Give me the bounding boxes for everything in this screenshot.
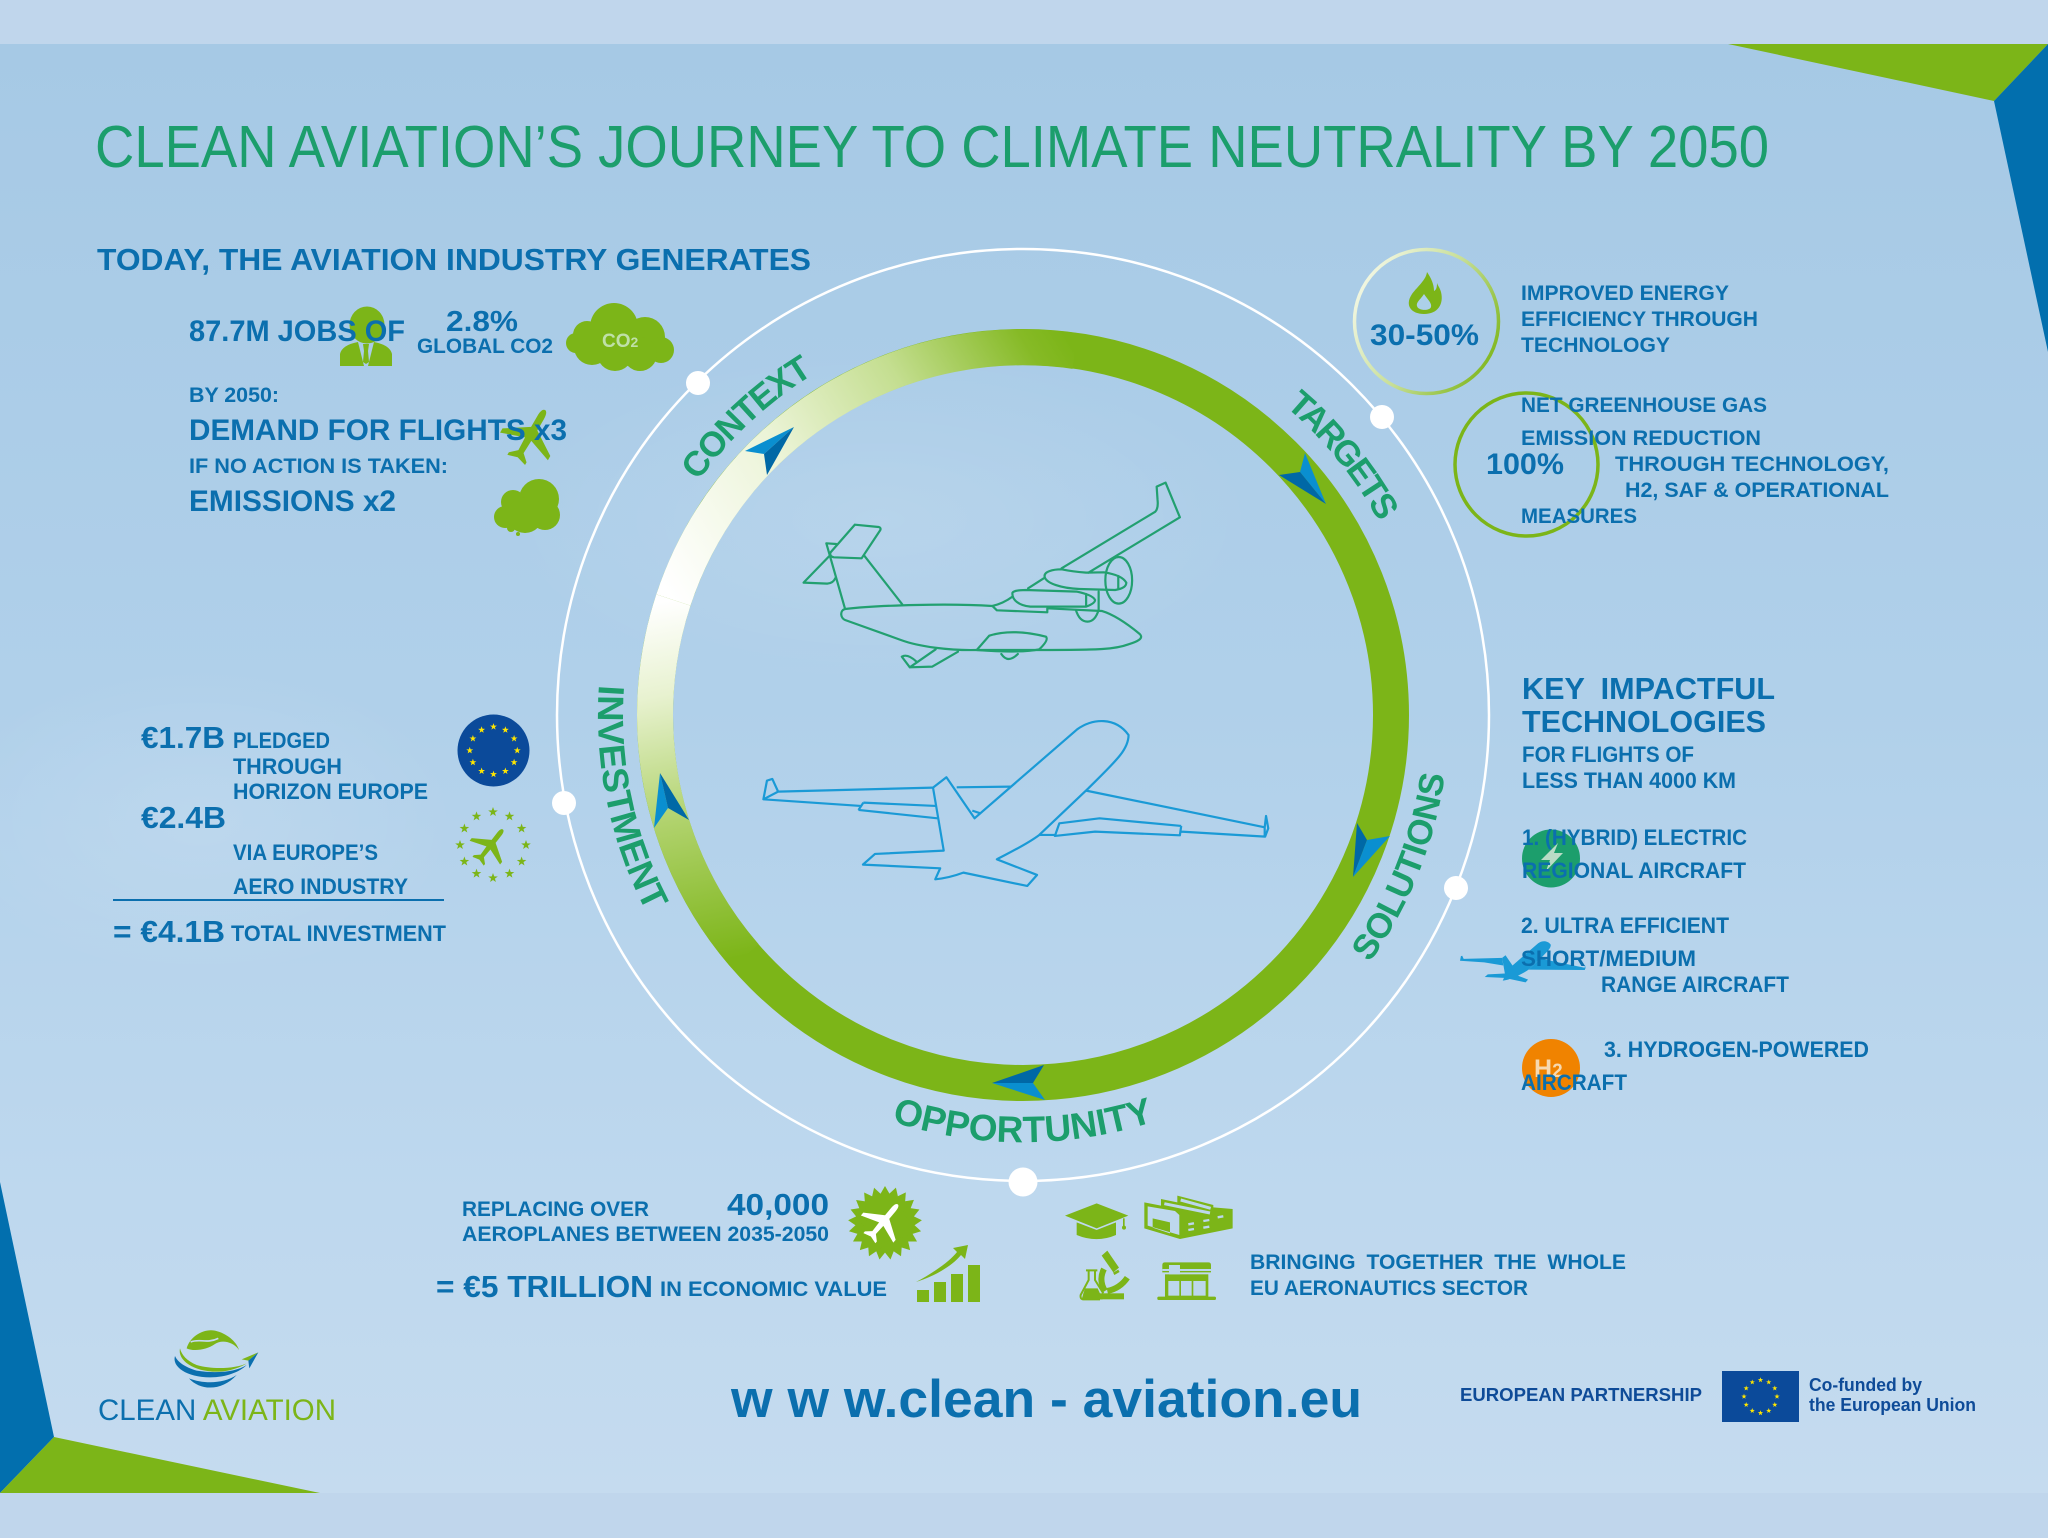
icon: flame [1409,272,1442,314]
text: energy efficiency: TECHNOLOGY [1521,334,1670,357]
icon: CO2 cloud: CO2 [602,331,638,352]
icon: CO2 cloud [566,303,674,371]
stat: 1.7B: HORIZON EUROPE [233,779,428,804]
co-funded text: Co-funded by [1809,1375,1922,1395]
text: economic value: = €5 TRILLION [436,1269,653,1304]
text: economic value [436,1269,887,1304]
stat: 1.7B [141,720,428,804]
corner accent: bottom left [0,1182,320,1493]
text: replacing: REPLACING OVER [462,1198,649,1221]
icon: hydrogen: H2 [1534,1055,1563,1083]
stat: 2.4B: VIA EUROPE’S [233,840,378,865]
text: hydrogen powered: AIRCRAFT [1521,1070,1628,1095]
ring label: targets: TARGETS [1292,388,1397,518]
icon: person [340,306,392,366]
arrow: opportunity [992,1065,1045,1100]
text: if no action: IF NO ACTION IS TAKEN: [189,455,448,478]
icon: hydrogen [1522,1039,1580,1097]
panel: targets [1354,250,1889,536]
green propeller plane outline [804,483,1180,667]
stat: 2.4B: €2.4B [141,800,226,835]
target ring 30-50 [1354,250,1498,394]
stat: CO2 share: 2.8% [446,306,518,338]
heading: key technologies: TECHNOLOGIES [1522,704,1766,739]
EU flag [1722,1371,1799,1422]
panel: investment [113,714,531,949]
arrow: context [745,427,794,475]
text: flight range [1522,742,1736,793]
stat: 1.7B: THROUGH [233,754,342,779]
european partnership label: EUROPEAN PARTNERSHIP [1460,1385,1702,1405]
text: net greenhouse gas: MEASURES [1521,505,1637,528]
panel: context [97,242,811,536]
panel: opportunity [436,1174,1626,1304]
text: flight range: FOR FLIGHTS OF [1522,742,1694,767]
stat: total: TOTAL INVESTMENT [231,921,447,946]
blue airliner outline [763,721,1268,886]
text: hydrogen powered [1521,1037,1869,1095]
icon: green plane [492,396,569,474]
text: flight range: LESS THAN 4000 KM [1522,768,1736,793]
text: demand: DEMAND FOR FLIGHTS x3 [189,414,567,447]
outer white ring [557,249,1489,1181]
text: hybrid electric: REGIONAL AIRCRAFT [1522,858,1747,883]
text: net greenhouse gas: THROUGH TECHNOLOGY, [1615,453,1889,476]
text: net greenhouse gas: H2, SAF & OPERATIONAL [1625,479,1889,502]
text: energy efficiency: EFFICIENCY THROUGH [1521,308,1758,331]
text: hybrid electric [1522,825,1747,883]
logo mark [175,1330,258,1388]
icon: star ring plane [455,807,531,882]
arrow: solutions [1353,823,1390,877]
panel: solutions [1460,671,1869,1097]
heading: key technologies [1522,671,1775,739]
icon: building [1157,1262,1216,1300]
text: hydrogen powered: 3. HYDROGEN-POWERED [1604,1037,1869,1062]
icon: electric [1522,830,1580,888]
ring label: solutions: SOLUTIONS [1354,774,1444,959]
text: aeronautics sector: BRINGING TOGETHER THE WHOLE [1250,1251,1626,1274]
text: hybrid electric: 1. (HYBRID) ELECTRIC [1522,825,1747,850]
ring markers [552,371,1468,1196]
corner accent: top right [1728,44,2048,352]
stat: 100%: 100% [1486,448,1564,481]
text: ultra efficient: SHORT/MEDIUM [1521,946,1696,971]
target ring 100 [1455,393,1598,536]
arrow: targets [1279,453,1326,504]
text: net greenhouse gas: NET GREENHOUSE GAS [1521,394,1767,417]
stat: 30-50%: 30-50% [1370,319,1479,352]
text: energy efficiency [1521,282,1758,357]
text: replacing [462,1187,829,1246]
stat: jobs: 87.7M JOBS OF [189,315,405,348]
ring label: opportunity: OPPORTUNITY [896,1097,1147,1142]
text: aeronautics sector [1250,1251,1626,1300]
icon: small airliner [1460,941,1586,982]
text: by 2050: BY 2050: [189,384,279,407]
text: emissions: EMISSIONS x2 [189,485,396,518]
icon: graduation cap [1065,1203,1128,1239]
icon: microscope and flask [1081,1251,1127,1299]
stat: 2.4B [141,800,408,899]
stat: 1.7B: PLEDGED [233,728,330,753]
heading: today: TODAY, THE AVIATION INDUSTRY GENERATES [97,242,811,277]
text: ultra efficient: RANGE AIRCRAFT [1601,972,1790,997]
icon: starburst plane [848,1174,934,1262]
text: replacing: AEROPLANES BETWEEN 2035-2050 [462,1223,829,1246]
text: aeronautics sector: EU AERONAUTICS SECTOR [1250,1277,1528,1300]
logo wordmark: CLEAN AVIATION [98,1394,336,1427]
co-funded text: the European Union [1809,1395,1976,1415]
arrow: investment [654,773,689,828]
text: ultra efficient: 2. ULTRA EFFICIENT [1521,913,1730,938]
text: net greenhouse gas [1521,394,1889,528]
logo: clean aviation [98,1330,336,1427]
heading: key technologies: KEY IMPACTFUL [1522,671,1775,706]
icon: emissions cloud [494,479,560,536]
stat: 2.4B: AERO INDUSTRY [233,874,408,899]
icon group: sector [1065,1196,1233,1300]
icon: factory [1144,1196,1233,1239]
text: economic value: IN ECONOMIC VALUE [660,1278,887,1301]
stat: total: = €4.1B [113,914,225,949]
title: CLEAN AVIATION’S JOURNEY TO CLIMATE NEUTRALITY BY 2050 [95,114,1769,180]
text: energy efficiency: IMPROVED ENERGY [1521,282,1729,305]
website url: w w w.clean - aviation.eu [730,1370,1362,1429]
text: net greenhouse gas: EMISSION REDUCTION [1521,427,1761,450]
icon: growth chart [916,1245,980,1302]
text: replacing: 40,000 [727,1187,829,1222]
ring label: context: CONTEXT [684,354,807,476]
stat: total [113,914,447,949]
green journey ring [655,347,1391,1083]
text: ultra efficient [1521,913,1790,997]
stat: CO2 share [417,306,553,358]
icon: EU circle [458,714,530,786]
stat: 1.7B: €1.7B [141,720,225,755]
ring label: investment: INVESTMENT [598,687,669,905]
co-funded text [1809,1375,1976,1415]
stat: CO2 share: GLOBAL CO2 [417,335,553,358]
